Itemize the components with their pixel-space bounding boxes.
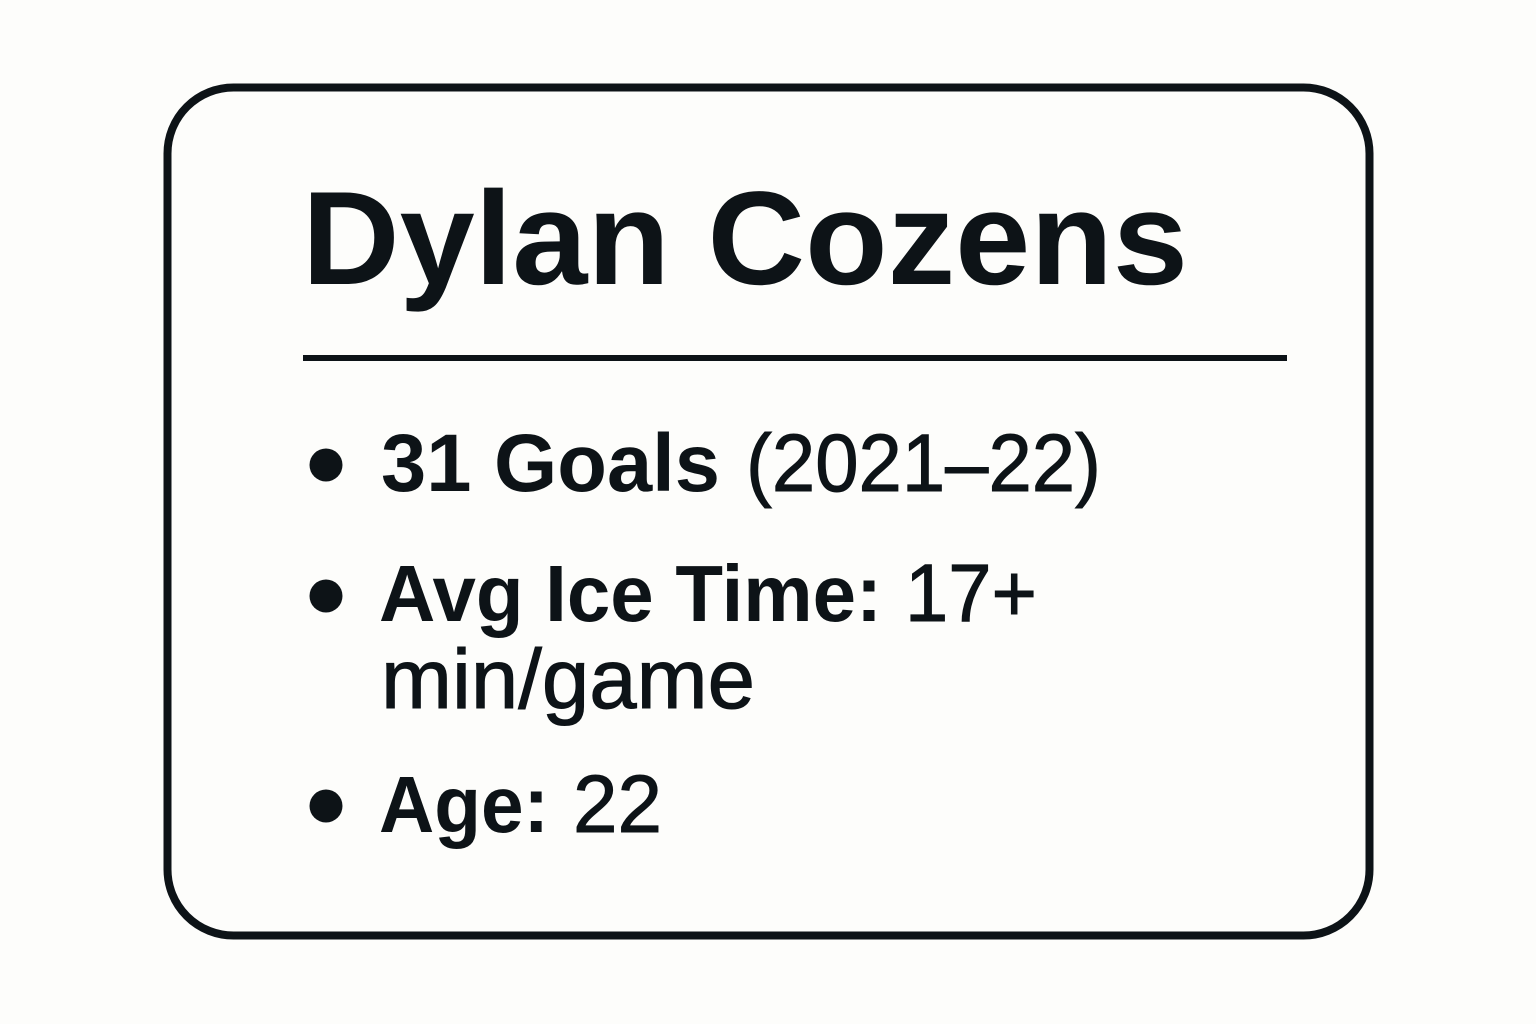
stat: age: Age:	[379, 760, 549, 849]
title: Dylan Cozens	[302, 165, 1188, 313]
stat: goals	[310, 418, 1101, 509]
stat: age	[310, 759, 662, 850]
stat: goals: (2021–22)	[746, 418, 1101, 509]
stat: age: 22	[573, 759, 662, 850]
stat: average ice time: min/game	[381, 632, 755, 726]
stat: average ice time	[310, 548, 1037, 726]
stat: average ice time: Avg Ice Time:	[379, 549, 882, 638]
stat: average ice time: 17+	[905, 548, 1037, 639]
panel: player card	[168, 88, 1370, 936]
stat: goals: 31 Goals	[381, 418, 720, 509]
